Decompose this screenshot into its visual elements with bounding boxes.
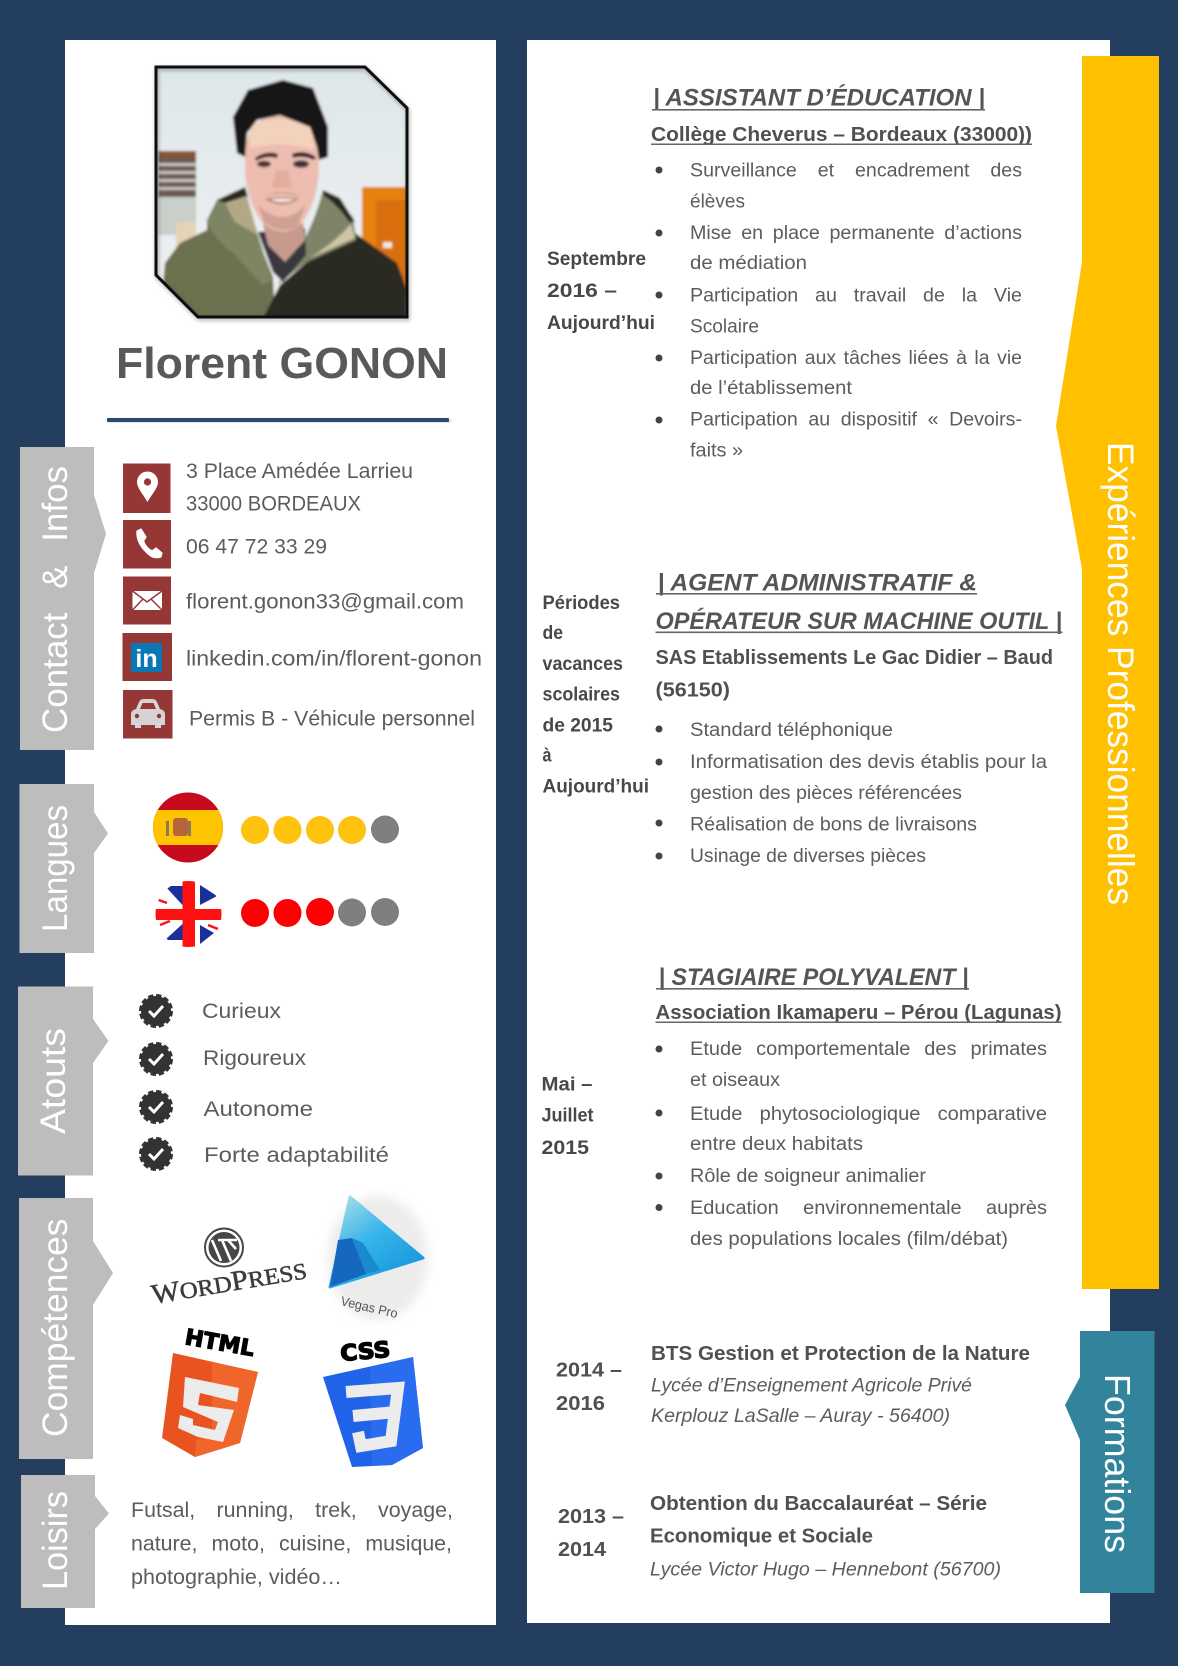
- education: Baccalauréat: Lycée Victor Hugo – Hennebont (56700): [650, 1560, 1001, 1580]
- experience: Stagiaire polyvalent: Juillet: [542, 1106, 594, 1126]
- experience: Assistant d'éducation: [547, 84, 1032, 462]
- education: BTS: Kerplouz LaSalle – Auray - 56400): [651, 1406, 950, 1427]
- education: BTS: [556, 1343, 1030, 1427]
- experience: Assistant d'éducation: | ASSISTANT D’ÉDUCATION |: [653, 84, 985, 112]
- experience: Agent administratif: Périodes: [542, 593, 620, 614]
- experience: Assistant d'éducation: Septembre: [547, 249, 646, 270]
- list: strengths: Autonome: [204, 1098, 313, 1121]
- logo: HTML5: HTML: [183, 1325, 256, 1362]
- tab: Atouts: [18, 986, 108, 1176]
- text: hobbies: Futsal, running, trek, voyage,: [131, 1499, 453, 1522]
- banner: Formations: [1065, 1331, 1154, 1593]
- driving licence: Permis B - Véhicule personnel: [189, 708, 475, 730]
- experience: Stagiaire polyvalent: Etude phytosociologique comparative: [690, 1104, 1047, 1125]
- list: strengths: Rigoureux: [203, 1047, 307, 1070]
- list: strengths: Curieux: [202, 1000, 282, 1023]
- experience: Stagiaire polyvalent: | STAGIAIRE POLYVALENT |: [658, 964, 968, 991]
- rating: English level 3 of 5: [241, 898, 399, 927]
- experience: Agent administratif: (56150): [656, 680, 730, 702]
- education: Baccalauréat: Economique et Sociale: [650, 1526, 873, 1548]
- experience: Stagiaire polyvalent: Mai –: [542, 1074, 592, 1096]
- education: BTS: 2014 –: [556, 1360, 622, 1382]
- icon: Spanish flag: [153, 792, 223, 862]
- banner: Expériences Professionnelles: [1056, 56, 1159, 1289]
- email: florent.gonon33@gmail.com: [186, 590, 464, 614]
- panel: right column: [527, 40, 1110, 1623]
- experience: Assistant d'éducation: faits »: [690, 440, 743, 462]
- experience: Agent administratif: | AGENT ADMINISTRATIF &: [658, 570, 977, 596]
- logo: WordPress: [149, 1228, 309, 1311]
- list: strengths: Forte adaptabilité: [204, 1144, 389, 1167]
- logo: WordPress: WORDPRESS: [149, 1254, 309, 1311]
- portrait photo: [150, 60, 410, 320]
- experience: Assistant d'éducation: Participation aux tâches liées à la vie: [690, 348, 1022, 369]
- icon: UK flag: [156, 881, 222, 947]
- tab: Contact & Infos: Contact & Infos: [36, 466, 75, 733]
- experience: Assistant d'éducation: Aujourd’hui: [547, 313, 655, 334]
- education: Baccalauréat: 2013 –: [558, 1506, 624, 1528]
- icon: car: [123, 690, 172, 738]
- experience: Stagiaire polyvalent: entre deux habitats: [690, 1134, 863, 1155]
- experience: Assistant d'éducation: Scolaire: [690, 316, 759, 338]
- address text: [186, 460, 413, 516]
- list: strengths: [141, 996, 389, 1169]
- experience: Agent administratif: de 2015: [542, 716, 613, 736]
- experience: Stagiaire polyvalent: des populations locales (film/débat): [690, 1229, 1008, 1250]
- rating: Spanish level 4 of 5: [241, 816, 399, 844]
- experience: Stagiaire polyvalent: Etude comportementale des primates: [690, 1039, 1047, 1060]
- experience: Agent administratif: Aujourd’hui: [542, 776, 649, 798]
- experience: Agent administratif: OPÉRATEUR SUR MACHINE OUTIL |: [656, 607, 1062, 635]
- address text: 3 Place Amédée Larrieu: [186, 460, 413, 483]
- text: hobbies: nature, moto, cuisine, musique,: [131, 1532, 452, 1556]
- banner: Expériences Professionnelles: Expériences Professionnelles: [1100, 442, 1141, 905]
- logo: HTML5: [162, 1325, 258, 1457]
- tab: Langues: Langues: [36, 805, 75, 932]
- experience: Assistant d'éducation: de l’établissement: [690, 378, 853, 399]
- tab: Langues: [20, 784, 108, 953]
- experience: Stagiaire polyvalent: [542, 964, 1062, 1250]
- name heading: Florent GONON: [116, 339, 448, 388]
- experience: Assistant d'éducation: Participation au dispositif « Devoirs-: [690, 410, 1022, 430]
- tab: Compétences: Compétences: [36, 1218, 75, 1437]
- icon: linkedin: [122, 633, 172, 681]
- experience: Stagiaire polyvalent: et oiseaux: [690, 1070, 781, 1091]
- tab: Compétences: [19, 1198, 113, 1459]
- experience: Assistant d'éducation: Participation au travail de la Vie: [690, 286, 1022, 306]
- experience: Agent administratif: [542, 570, 1062, 867]
- experience: Stagiaire polyvalent: Rôle de soigneur animalier: [690, 1166, 927, 1187]
- logo: CSS3: CSS: [339, 1338, 391, 1367]
- tab: Atouts: Atouts: [34, 1028, 73, 1134]
- logo: CSS3: [323, 1338, 423, 1467]
- experience: Assistant d'éducation: Collège Cheverus – Bordeaux (33000)): [651, 124, 1032, 146]
- experience: Agent administratif: Usinage de diverses pièces: [690, 846, 926, 867]
- icon: mail: [123, 576, 171, 624]
- icon: phone: [123, 520, 171, 568]
- experience: Assistant d'éducation: de médiation: [690, 253, 807, 274]
- tab: Contact & Infos: [20, 447, 106, 750]
- experience: Agent administratif: de: [542, 623, 563, 644]
- experience: Agent administratif: scolaires: [542, 684, 620, 706]
- education: BTS: BTS Gestion et Protection de la Nature: [651, 1343, 1030, 1365]
- text: hobbies: [131, 1499, 453, 1589]
- tab: Loisirs: Loisirs: [36, 1491, 75, 1590]
- experience: Stagiaire polyvalent: 2015: [542, 1138, 589, 1159]
- icon: linkedin: in: [135, 645, 158, 673]
- experience: Agent administratif: Réalisation de bons de livraisons: [690, 814, 977, 836]
- logo: Vegas Pro: Vegas Pro: [339, 1293, 399, 1321]
- tab: Loisirs: [21, 1475, 109, 1608]
- logo: Vegas Pro: [328, 1196, 428, 1321]
- experience: Stagiaire polyvalent: Education environnementale auprès: [690, 1198, 1047, 1219]
- address text: 33000 BORDEAUX: [186, 492, 361, 516]
- banner: Formations: Formations: [1097, 1374, 1138, 1553]
- phone number: 06 47 72 33 29: [186, 536, 327, 558]
- icon: location pin: [123, 464, 170, 513]
- experience: Agent administratif: SAS Etablissements Le Gac Didier – Baud: [656, 647, 1053, 669]
- education: BTS: 2016: [556, 1393, 605, 1415]
- panel: left column: [65, 40, 496, 1625]
- education: Baccalauréat: [558, 1493, 1001, 1580]
- education: BTS: Lycée d’Enseignement Agricole Privé: [651, 1376, 972, 1396]
- linkedin url: linkedin.com/in/florent-gonon: [186, 648, 482, 670]
- experience: Assistant d'éducation: Mise en place permanente d’actions: [690, 223, 1022, 244]
- experience: Assistant d'éducation: Surveillance et encadrement des: [690, 160, 1022, 182]
- experience: Assistant d'éducation: 2016 –: [547, 281, 617, 302]
- experience: Stagiaire polyvalent: Association Ikamaperu – Pérou (Lagunas): [656, 1002, 1062, 1024]
- name divider: [107, 418, 449, 422]
- experience: Agent administratif: vacances: [542, 654, 623, 675]
- education: Baccalauréat: 2014: [558, 1539, 607, 1561]
- experience: Agent administratif: Informatisation des devis établis pour la: [690, 752, 1047, 773]
- experience: Assistant d'éducation: élèves: [690, 192, 745, 212]
- education: Baccalauréat: Obtention du Baccalauréat – Série: [650, 1493, 987, 1515]
- experience: Agent administratif: gestion des pièces référencées: [690, 783, 962, 804]
- experience: Agent administratif: à: [542, 746, 552, 766]
- text: hobbies: photographie, vidéo…: [131, 1566, 342, 1589]
- experience: Agent administratif: Standard téléphonique: [690, 720, 893, 741]
